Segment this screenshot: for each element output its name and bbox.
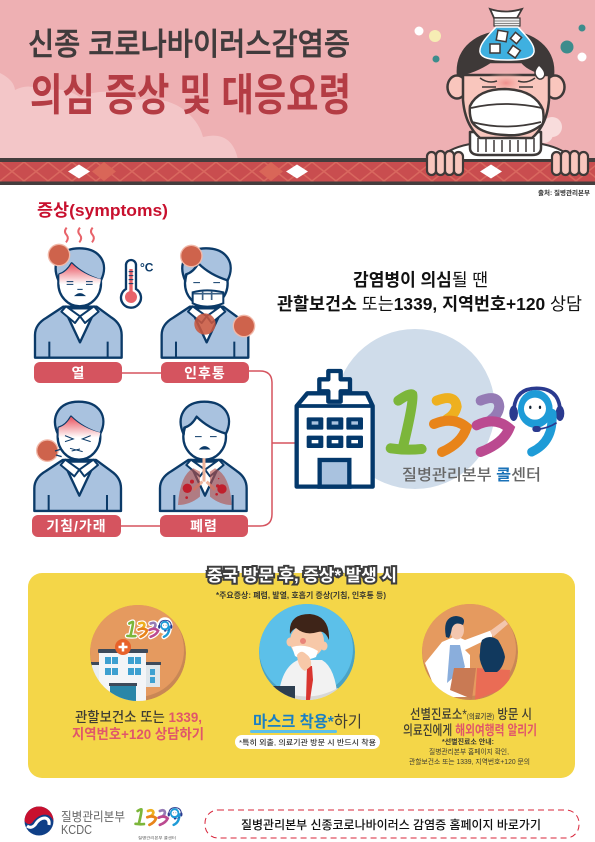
- icon: hospital: [297, 371, 373, 487]
- source note: 출처: 질병관리본부: [538, 188, 590, 197]
- pale circle: [335, 329, 495, 489]
- KCDC emblem: [24, 806, 54, 836]
- footer 1339 logo: [136, 808, 182, 840]
- text: consult: 지역번호+120 상담하기: [72, 726, 204, 742]
- consultation heading: [277, 270, 582, 314]
- hands: [427, 151, 588, 175]
- title line 2: 의심 증상 및 대응요령: [30, 71, 351, 120]
- person: cough: [34, 402, 121, 511]
- virus dots: [414, 24, 586, 62]
- circle: hospital call: [90, 603, 186, 703]
- title line 1: 신종 코로나바이러스감염증: [28, 27, 350, 62]
- homepage link button: [205, 810, 579, 838]
- label: pneumonia: 폐렴: [190, 518, 218, 534]
- label: cough: [32, 515, 121, 537]
- person: fever: [35, 228, 122, 358]
- label: pneumonia: [160, 515, 248, 537]
- label: sore throat: 인후통: [184, 365, 226, 381]
- panel title: 중국 방문 후, 증상* 발생 시: [207, 566, 397, 585]
- pale puff behind man: [535, 117, 562, 143]
- text: wear a mask: 마스크 착용*하기: [253, 713, 362, 731]
- panel subnote: *주요증상: 폐렴, 발열, 호흡기 증상(기침, 인후통 등): [216, 590, 386, 600]
- consultation heading: 관할보건소 또는1339, 지역번호+120 상담: [277, 294, 582, 314]
- KCDC wordmark: KCDC: [61, 823, 92, 837]
- KCDC wordmark: 질병관리본부: [61, 810, 125, 824]
- person: sore throat: [162, 245, 255, 358]
- label: fever: [34, 362, 122, 383]
- thermometer icon: °C: [140, 261, 154, 275]
- thermometer icon: [121, 260, 154, 308]
- connector lines: [121, 371, 295, 526]
- homepage link button: 질병관리본부 신종코로나바이러스 감염증 홈페이지 바로가기: [241, 818, 541, 832]
- text: screening clinic: [403, 707, 537, 766]
- text: consult: [72, 709, 204, 742]
- text: consult: 관할보건소 또는 1339,: [75, 709, 202, 725]
- text: screening clinic: *선별진료소 안내:: [442, 737, 494, 746]
- person: pneumonia: [160, 402, 247, 511]
- note pill: [235, 735, 380, 749]
- text: screening clinic: 질병관리본부 홈페이지 확인,: [429, 747, 509, 756]
- circle: doctor and patient: [422, 602, 518, 700]
- panel: after visiting China: [28, 566, 575, 778]
- header banner: [0, 0, 595, 185]
- text: screening clinic: 선별진료소*(의료기관) 방문 시: [410, 707, 532, 722]
- masked sick man: [440, 32, 572, 160]
- label: sore throat: [161, 362, 249, 383]
- symptoms heading: 증상(symptoms): [37, 201, 168, 220]
- footer 1339 logo: 질병관리본부 콜센터: [138, 835, 176, 840]
- KCDC wordmark: [61, 810, 125, 837]
- call centre caption: 질병관리본부 콜센터: [402, 466, 541, 484]
- label: cough: 기침/가래: [46, 518, 107, 534]
- mini 1339 logo: [127, 620, 172, 637]
- ice bag: [480, 9, 534, 60]
- text: screening clinic: 관할보건소 또는 1339, 지역번호+120 문의: [409, 757, 530, 766]
- 1339 call centre logo: [391, 388, 564, 452]
- circle: man with mask: [259, 602, 355, 702]
- band pattern: [0, 158, 595, 185]
- label: fever: 열: [72, 365, 84, 381]
- consultation heading: 감염병이 의심될 땐: [353, 270, 488, 290]
- icon: plus badge: [115, 639, 131, 655]
- text: screening clinic: 의료진에게 해외여행력 알리기: [403, 723, 537, 738]
- note pill: *특히 외출, 의료기관 방문 시 반드시 착용: [239, 737, 376, 747]
